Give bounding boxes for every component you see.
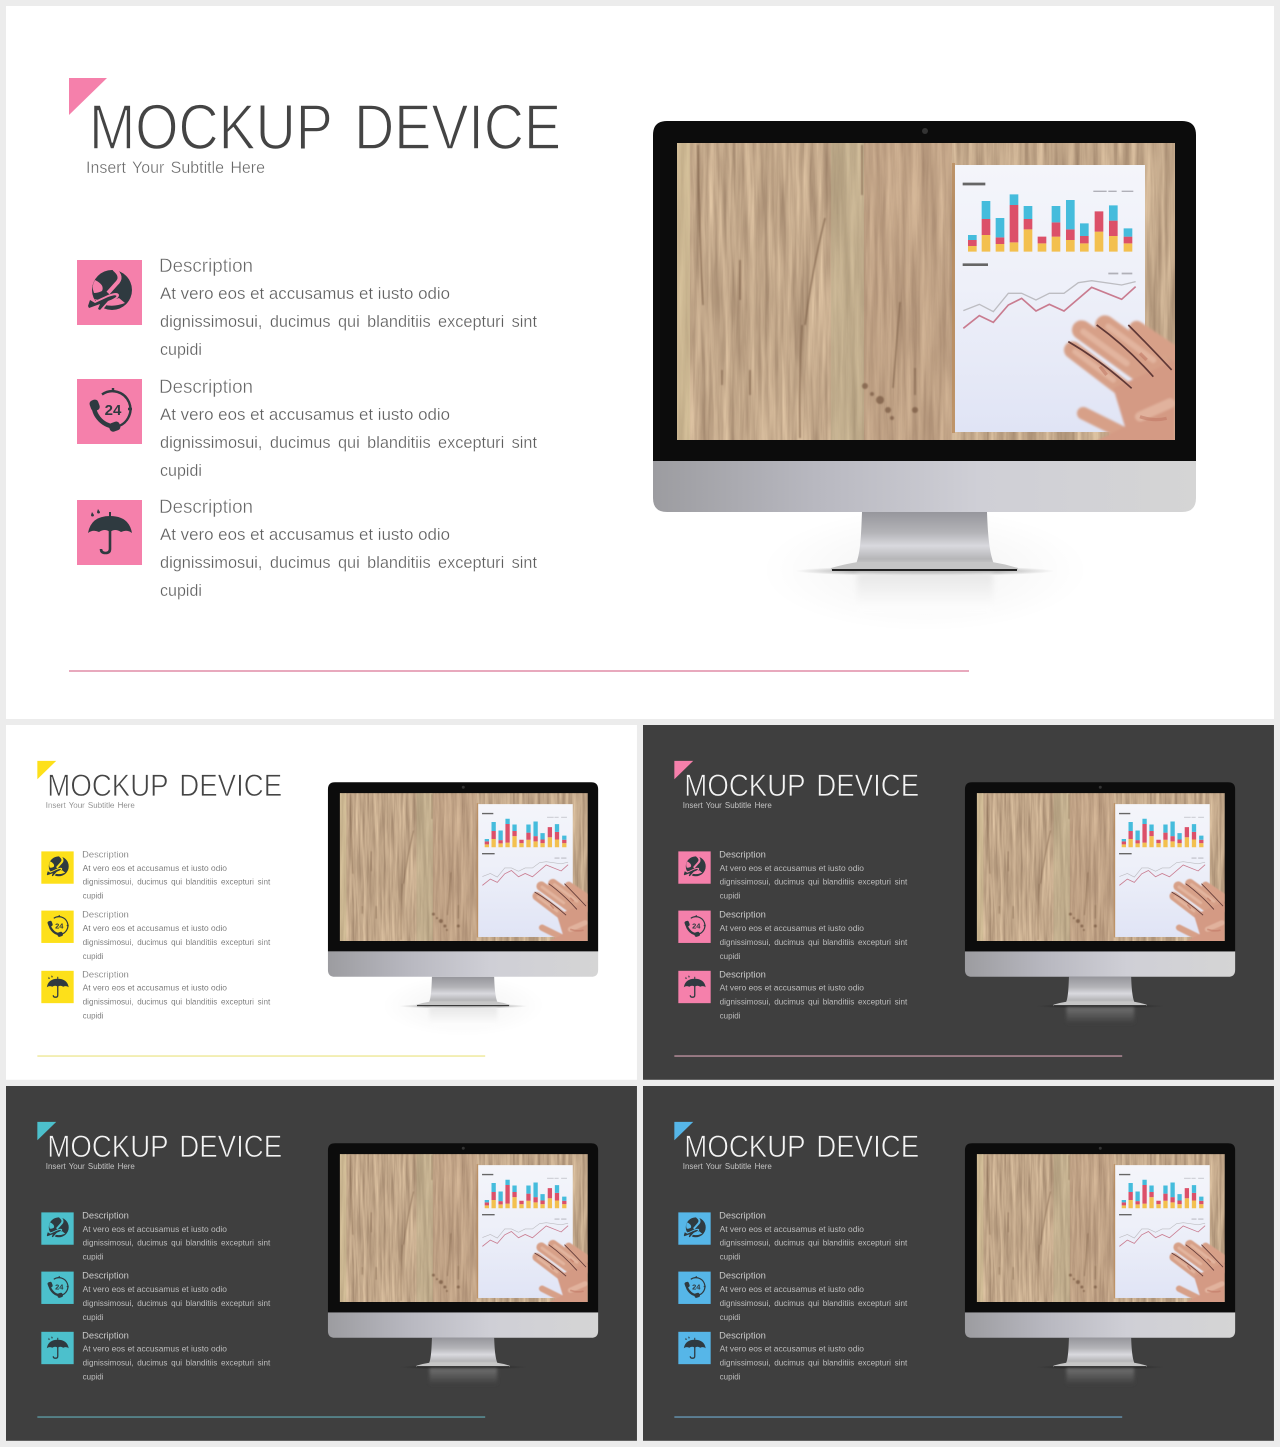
subtitle: Insert Your Subtitle Here — [46, 1161, 135, 1171]
text block: description 2: cupidi — [83, 1312, 104, 1322]
text block: description 1: Description — [82, 849, 129, 860]
text block: description 2: At vero eos et accusamus et iusto odio — [83, 923, 227, 933]
text block: description 2: At vero eos et accusamus et iusto odio — [160, 405, 450, 424]
icon: 24 hour phone: 24 — [55, 922, 64, 931]
icon: 24 hour phone — [678, 1272, 711, 1304]
text block: description 2: cupidi — [720, 951, 741, 961]
text block: description 1: Description — [82, 1210, 129, 1221]
text block: description 1: cupidi — [720, 1252, 741, 1262]
icon: umbrella — [41, 971, 74, 1003]
text block: description 3: dignissimosui, ducimus qui blanditiis excepturi sint — [160, 553, 537, 572]
text block: description 3: cupidi — [83, 1011, 104, 1021]
icon: globe and plane — [77, 260, 142, 325]
text block: description 1: At vero eos et accusamus et iusto odio — [83, 1224, 227, 1234]
text block: description 3: dignissimosui, ducimus qui blanditiis excepturi sint — [83, 1358, 271, 1368]
icon: umbrella — [41, 1332, 74, 1364]
text block: description 2: At vero eos et accusamus et iusto odio — [83, 1284, 227, 1294]
monitor mockup — [653, 121, 1196, 632]
text block: description 1: At vero eos et accusamus et iusto odio — [720, 1224, 864, 1234]
monitor mockup — [965, 1143, 1235, 1384]
text block: description 3: At vero eos et accusamus et iusto odio — [83, 983, 227, 993]
text block: description 1: dignissimosui, ducimus qui blanditiis excepturi sint — [720, 1238, 908, 1248]
text block: description 3 — [82, 969, 271, 1021]
text block: description 3: dignissimosui, ducimus qui blanditiis excepturi sint — [720, 1358, 908, 1368]
panel: small white yellow slide — [6, 725, 637, 1080]
accent triangle — [674, 761, 693, 779]
text block: description 3: At vero eos et accusamus et iusto odio — [83, 1344, 227, 1354]
footer line — [674, 1055, 1122, 1057]
footer line — [69, 670, 969, 672]
icon: umbrella — [77, 500, 142, 565]
subtitle: Insert Your Subtitle Here — [86, 158, 265, 177]
text block: description 2 — [82, 1271, 271, 1322]
text block: description 3 — [159, 497, 537, 600]
text block: description 1 — [719, 1210, 908, 1262]
text block: description 3: cupidi — [720, 1011, 741, 1021]
accent triangle — [37, 1122, 56, 1140]
text block: description 2: Description — [719, 1271, 766, 1282]
accent triangle — [69, 78, 107, 115]
icon: globe and plane — [678, 1212, 711, 1245]
panel: small dark pink slide — [643, 725, 1274, 1080]
monitor mockup — [328, 782, 598, 1036]
icon: 24 hour phone — [678, 911, 711, 943]
icon: 24 hour phone: 24 — [55, 1283, 64, 1292]
text block: description 3 — [719, 1330, 908, 1382]
panel: small dark blue slide — [643, 1086, 1274, 1441]
text block: description 3: cupidi — [160, 581, 202, 600]
text block: description 1: dignissimosui, ducimus qui blanditiis excepturi sint — [83, 877, 271, 887]
text block: description 2 — [719, 1271, 908, 1322]
text block: description 1 — [719, 849, 908, 901]
icon: umbrella — [678, 1332, 711, 1364]
text block: description 2: dignissimosui, ducimus qui blanditiis excepturi sint — [83, 937, 271, 947]
text block: description 2: cupidi — [720, 1312, 741, 1322]
icon: 24 hour phone: 24 — [692, 1283, 701, 1292]
text block: description 3: cupidi — [83, 1372, 104, 1382]
icon: umbrella — [678, 971, 711, 1003]
text block: description 3: Description — [159, 497, 253, 518]
text block: description 2: dignissimosui, ducimus qui blanditiis excepturi sint — [720, 937, 908, 947]
text block: description 3: At vero eos et accusamus et iusto odio — [160, 525, 450, 544]
text block: description 1: dignissimosui, ducimus qui blanditiis excepturi sint — [160, 312, 537, 331]
text block: description 2: dignissimosui, ducimus qui blanditiis excepturi sint — [83, 1298, 271, 1308]
text block: description 3: dignissimosui, ducimus qui blanditiis excepturi sint — [720, 997, 908, 1007]
icon: 24 hour phone — [77, 379, 142, 444]
text block: description 1: dignissimosui, ducimus qui blanditiis excepturi sint — [720, 877, 908, 887]
text block: description 1: cupidi — [720, 891, 741, 901]
monitor mockup — [328, 1143, 598, 1384]
text block: description 2: Description — [719, 910, 766, 921]
text block: description 3: At vero eos et accusamus et iusto odio — [720, 1344, 864, 1354]
icon: 24 hour phone: 24 — [692, 922, 701, 931]
text block: description 2: cupidi — [160, 461, 202, 480]
text block: description 3: Description — [719, 969, 766, 980]
accent triangle — [37, 761, 56, 779]
text block: description 1: cupidi — [83, 891, 104, 901]
footer line — [674, 1416, 1122, 1418]
text block: description 1: Description — [719, 849, 766, 860]
panel: small dark teal slide — [6, 1086, 637, 1441]
text block: description 1: Description — [719, 1210, 766, 1221]
text block: description 3: cupidi — [720, 1372, 741, 1382]
footer line — [37, 1416, 485, 1418]
footer line — [37, 1055, 485, 1057]
text block: description 2 — [82, 910, 271, 961]
text block: description 2: dignissimosui, ducimus qui blanditiis excepturi sint — [720, 1298, 908, 1308]
title: MOCKUP DEVICE — [47, 1128, 282, 1164]
icon: globe and plane — [41, 851, 74, 884]
accent triangle — [674, 1122, 693, 1140]
text block: description 1: cupidi — [160, 340, 202, 359]
text block: description 1 — [82, 849, 271, 901]
text block: description 2: Description — [82, 1271, 129, 1282]
text block: description 2 — [159, 377, 537, 480]
text block: description 2 — [719, 910, 908, 961]
text block: description 1: cupidi — [83, 1252, 104, 1262]
panel: large white pink slide — [6, 6, 1274, 719]
text block: description 1 — [159, 256, 537, 359]
subtitle: Insert Your Subtitle Here — [46, 800, 135, 810]
text block: description 2: Description — [82, 910, 129, 921]
text block: description 2: At vero eos et accusamus et iusto odio — [720, 1284, 864, 1294]
text block: description 2: Description — [159, 377, 253, 398]
text block: description 3: Description — [82, 1330, 129, 1341]
text block: description 1: At vero eos et accusamus et iusto odio — [720, 863, 864, 873]
text block: description 1: Description — [159, 256, 253, 277]
icon: globe and plane — [41, 1212, 74, 1245]
text block: description 1: dignissimosui, ducimus qui blanditiis excepturi sint — [83, 1238, 271, 1248]
title: MOCKUP DEVICE — [684, 1128, 919, 1164]
text block: description 3: At vero eos et accusamus et iusto odio — [720, 983, 864, 993]
icon: 24 hour phone: 24 — [105, 402, 122, 419]
text block: description 2: cupidi — [83, 951, 104, 961]
title: MOCKUP DEVICE — [47, 767, 282, 803]
text block: description 1: At vero eos et accusamus et iusto odio — [83, 863, 227, 873]
text block: description 2: dignissimosui, ducimus qui blanditiis excepturi sint — [160, 433, 537, 452]
text block: description 1: At vero eos et accusamus et iusto odio — [160, 284, 450, 303]
text block: description 3: Description — [719, 1330, 766, 1341]
monitor mockup — [965, 782, 1235, 1023]
title: MOCKUP DEVICE — [684, 767, 919, 803]
text block: description 1 — [82, 1210, 271, 1262]
text block: description 3: Description — [82, 969, 129, 980]
text block: description 2: At vero eos et accusamus et iusto odio — [720, 923, 864, 933]
icon: 24 hour phone — [41, 911, 74, 943]
subtitle: Insert Your Subtitle Here — [683, 800, 772, 810]
icon: globe and plane — [678, 851, 711, 884]
text block: description 3: dignissimosui, ducimus qui blanditiis excepturi sint — [83, 997, 271, 1007]
subtitle: Insert Your Subtitle Here — [683, 1161, 772, 1171]
title: MOCKUP DEVICE — [89, 91, 561, 163]
text block: description 3 — [719, 969, 908, 1021]
text block: description 3 — [82, 1330, 271, 1382]
icon: 24 hour phone — [41, 1272, 74, 1304]
